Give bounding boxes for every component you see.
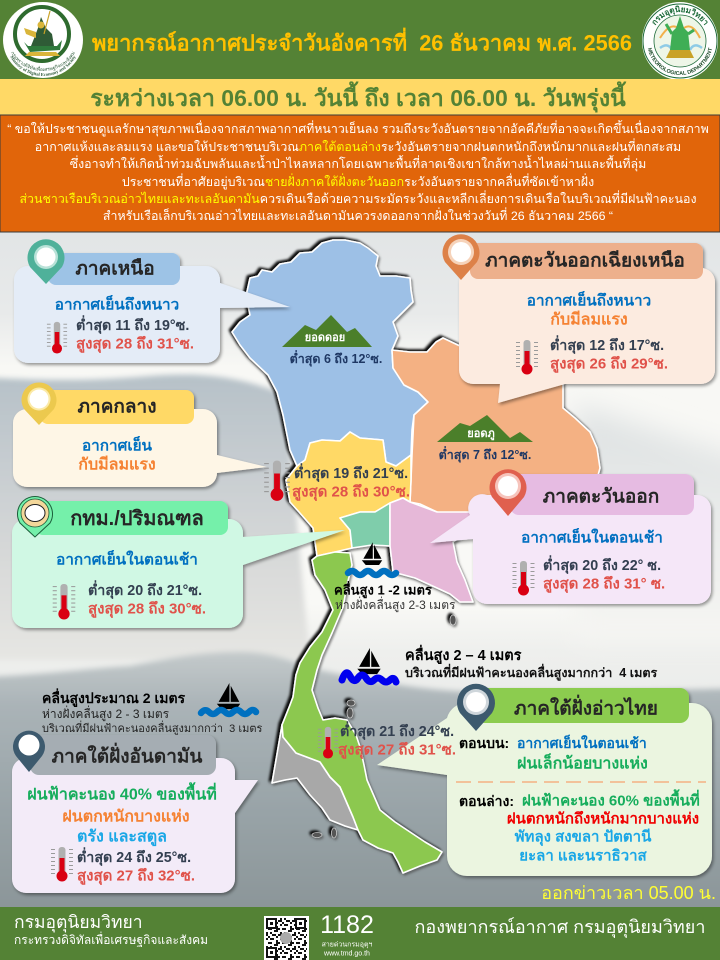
wave forecast: gulf north: คลื่นสูง 1 -2 เมตร	[334, 580, 432, 598]
icon: thermometer	[516, 340, 538, 374]
icon: ministry logo: Ministry of Digital Economy and Society	[10, 55, 76, 76]
mountain peak label: doi	[282, 315, 382, 367]
islands	[312, 615, 456, 838]
wave forecast: gulf north: ห่างฝั่งคลื่นสูง 2-3 เมตร	[335, 596, 456, 613]
panel: south gulf: ยะลา และนราธิวาส	[519, 846, 648, 864]
panel: south gulf	[377, 684, 712, 876]
issue time: ออกข่าวเวลา 05.00 น.	[541, 883, 716, 903]
south temperatures on map	[318, 720, 456, 760]
footer band: 1182	[320, 911, 374, 939]
footer band: www.tmd.go.th	[323, 950, 370, 958]
panel: south andaman	[12, 731, 258, 893]
wave forecast: gulf north	[334, 542, 456, 613]
footer band: กรมอุตุนิยมวิทยา	[14, 912, 143, 933]
panel: south andaman: ต่ำสุด 24 ถึง 25°ซ.	[77, 846, 191, 866]
map of Thailand by region	[232, 240, 600, 873]
icon: thermometer	[47, 322, 67, 354]
icon: pin	[13, 731, 45, 772]
panel: south gulf: ภาคใต้ฝั่งอ่าวไทย	[514, 694, 658, 720]
panel: south gulf: ฝนตกหนักถึงหนักมากบางแห่ง	[507, 810, 699, 828]
panel: north: อากาศเย็นถึงหนาว	[55, 294, 179, 314]
time range band	[0, 79, 720, 115]
icon: pin	[457, 684, 495, 731]
panel: central	[13, 382, 267, 487]
region: south andaman	[272, 725, 358, 830]
icon: wave	[342, 673, 396, 682]
panel: east: อากาศเย็นในตอนเช้า	[521, 526, 663, 546]
panel: north: ภาคเหนือ	[75, 258, 155, 280]
region: north	[232, 240, 428, 466]
central temperatures on map: สูงสุด 28 ถึง 30°ซ.	[292, 482, 410, 502]
icon: meteorological department logo: กรมอุตุนิยมวิทยา	[652, 6, 708, 26]
panel: central: ภาคกลาง	[78, 396, 156, 418]
wave forecast: gulf south: คลื่นสูง 2 – 4 เมตร	[405, 644, 522, 664]
icon: pin	[442, 234, 480, 280]
icon: meteorological department logo	[642, 2, 718, 79]
icon: thermometer	[53, 584, 75, 619]
header band	[0, 0, 720, 79]
panel: bangkok: กทม./ปริมณฑล	[70, 508, 204, 530]
panel: east: ภาคตะวันออก	[543, 486, 659, 508]
panel: bangkok: อากาศเย็นในตอนเช้า	[56, 548, 198, 568]
panel: northeast: ภาคตะวันออกเฉียงเหนือ	[485, 250, 685, 272]
wave forecast: andaman: คลื่นสูงประมาณ 2 เมตร	[42, 688, 186, 707]
panel: central: กับมีลมแรง	[78, 454, 156, 474]
wave forecast: gulf south: บริเวณที่มีฝนฟ้าคะนองคลื่นสูงมากกว่า 4 เมตร	[405, 663, 658, 681]
mountain peak label: phu: ต่ำสุด 7 ถึง 12°ซ.	[439, 446, 531, 463]
panel: northeast	[442, 234, 715, 403]
central temperatures on map: ต่ำสุด 19 ถึง 21°ซ.	[294, 462, 408, 482]
icon: meteorological department logo: METEOROLOGICAL DEPARTMENT	[648, 47, 712, 75]
panel: bangkok: ต่ำสุด 20 ถึง 21°ซ.	[88, 579, 202, 599]
region: south gulf	[282, 552, 442, 873]
panel: north: สูงสุด 28 ถึง 31°ซ.	[76, 334, 194, 354]
icon: boat	[362, 542, 382, 565]
icon: thermometer	[318, 727, 338, 759]
panel: northeast: ต่ำสุด 12 ถึง 17°ซ.	[550, 334, 664, 354]
icon: wave	[201, 710, 256, 714]
mountain peak label: phu: ยอดภู	[467, 428, 495, 441]
panel: east: สูงสุด 28 ถึง 31° ซ.	[543, 574, 665, 594]
icon: ministry logo	[3, 2, 83, 78]
icon: pin	[17, 496, 52, 537]
panel: bangkok	[12, 496, 345, 628]
panel: south andaman: สูงสุด 27 ถึง 32°ซ.	[77, 866, 195, 886]
icon: pin	[28, 239, 64, 284]
warning panel: ส่วนชาวเรือบริเวณอ่าวไทยและทะเลอันดามันควรเดินเรือด้วยความระมัดระวังและหลีกเลี่ยงการเดินเรือในบริเวณที่มีฝนฟ้าคะนอง	[19, 190, 697, 206]
icon: boat	[217, 683, 240, 709]
wave forecast: andaman: ห่างฝั่งคลื่นสูง 2 - 3 เมตร	[42, 705, 170, 722]
panel: south andaman: ฝนฟ้าคะนอง 40% ของพื้นที่	[27, 782, 217, 804]
mountain peak label: doi: ต่ำสุด 6 ถึง 12°ซ.	[290, 350, 382, 367]
warning panel: ซึ่งอาจทำให้เกิดน้ำท่วมฉับพลันและน้ำป่าไหลหลากโดยเฉพาะพื้นที่ลาดเชิงเขาใกล้ทางน้ำไหลผ่านและพื้นที่ลุ่ม	[70, 155, 646, 172]
panel: north	[14, 239, 290, 363]
icon: QR code	[264, 916, 309, 960]
icon: boat	[357, 648, 381, 674]
panel: north: ต่ำสุด 11 ถึง 19°ซ.	[76, 314, 189, 334]
wave forecast: andaman	[42, 683, 262, 735]
south temperatures on map: ต่ำสุด 21 ถึง 24°ซ.	[340, 720, 454, 740]
icon: thermometer	[51, 847, 73, 882]
footer band: กระทรวงดิจิทัลเพื่อเศรษฐกิจและสังคม	[14, 931, 208, 947]
warning panel: อากาศแห้งและลมแรง และขอให้ประชาชนบริเวณภาคใต้ตอนล่างระวังอันตรายจากฝนตกหนักถึงหนักมากและฝนที่ตกสะสม	[35, 138, 681, 154]
panel: south andaman: ตรัง และสตูล	[77, 828, 167, 848]
warning panel: ประชาชนที่อาศัยอยู่บริเวณชายฝั่งภาคใต้ฝั่งตะวันออกระวังอันตรายจากคลื่นที่ซัดเข้าหาฝั่ง	[122, 173, 594, 190]
region: east	[390, 498, 473, 602]
panel: east: ต่ำสุด 20 ถึง 22° ซ.	[543, 554, 661, 574]
footer band: กองพยากรณ์อากาศ กรมอุตุนิยมวิทยา	[415, 917, 705, 938]
region: northeast	[392, 338, 600, 516]
region: bangkok	[340, 503, 390, 548]
footer band	[0, 907, 720, 960]
background: misty mountains	[0, 232, 720, 920]
warning panel	[0, 115, 720, 232]
panel: south gulf: ตอนล่าง:	[459, 793, 514, 809]
icon: thermometer	[512, 561, 534, 596]
panel: bangkok: สูงสุด 28 ถึง 30°ซ.	[88, 600, 206, 618]
warning panel: สำหรับเรือเล็กบริเวณอ่าวไทยและทะเลอันดามันควรงดออกจากฝั่งในช่วงวันที่ 26 ธันวาคม 2566 “	[103, 207, 613, 223]
panel: central: อากาศเย็น	[82, 434, 153, 454]
wave forecast: andaman: บริเวณที่มีฝนฟ้าคะนองคลื่นสูงมากกว่า 3 เมตร	[42, 720, 262, 735]
panel: south gulf: ฝนฟ้าคะนอง 60% ของพื้นที่	[522, 788, 700, 810]
panel: south andaman: ภาคใต้ฝั่งอันดามัน	[52, 742, 202, 768]
panel: south gulf: ฝนเล็กน้อยบางแห่ง	[517, 752, 648, 772]
icon: pin	[21, 382, 56, 425]
panel: south gulf: อากาศเย็นในตอนเช้า	[517, 734, 647, 751]
panel: northeast: สูงสุด 26 ถึง 29°ซ.	[550, 354, 668, 374]
footer band: สายด่วนกรมอุตุฯ	[322, 942, 372, 948]
mountain peak label: doi: ยอดดอย	[305, 332, 345, 344]
icon: wave	[348, 571, 396, 575]
title: พยากรณ์อากาศประจำวันอังคารที่ 26 ธันวาคม พ.ศ. 2566	[92, 28, 632, 56]
panel: south gulf: ตอนบน:	[459, 735, 509, 751]
panel: south gulf: พัทลุง สงขลา ปัตตานี	[515, 828, 652, 846]
panel: northeast: อากาศเย็นถึงหนาว	[527, 290, 651, 310]
central temperatures on map	[264, 461, 410, 502]
mountain peak label: phu	[437, 415, 533, 463]
region: central	[286, 432, 411, 556]
icon: ministry logo: กระทรวงดิจิทัลเพื่อเศรษฐกิจและสังคม	[11, 52, 75, 71]
icon: thermometer	[264, 461, 290, 501]
warning panel: “ ขอให้ประชาชนดูแลรักษาสุขภาพเนื่องจากสภาพอากาศที่หนาวเย็นลง รวมถึงระวังอันตรายจากอัคคีภัยที่อาจจะเกิดขึ้นเนื่องจากสภาพ	[7, 120, 709, 137]
panel: east	[430, 469, 711, 604]
icon: pin	[490, 469, 526, 516]
wave forecast: gulf south	[342, 644, 658, 682]
panel: south andaman: ฝนตกหนักบางแห่ง	[62, 808, 190, 826]
panel: northeast: กับมีลมแรง	[550, 310, 628, 328]
south temperatures on map: สูงสุด 27 ถึง 31°ซ.	[338, 740, 456, 760]
time range band: ระหว่างเวลา 06.00 น. วันนี้ ถึง เวลา 06.00 น. วันพรุ่งนี้	[90, 81, 627, 113]
